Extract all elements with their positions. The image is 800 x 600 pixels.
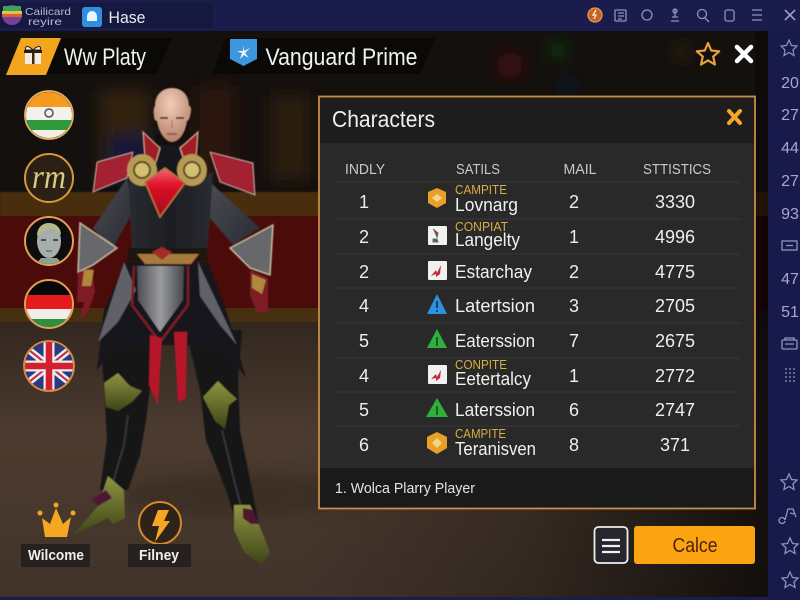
table column headers: SATILS: [456, 162, 500, 178]
row 6: 2772: [655, 366, 695, 386]
sidebar numbers: [781, 75, 799, 321]
menu button: [594, 527, 628, 563]
left boot: [72, 476, 125, 536]
row 7: 6: [569, 400, 579, 420]
sidebar numbers: 47: [781, 271, 799, 288]
row 1: [359, 183, 695, 215]
icon: gift: [24, 47, 42, 64]
belt: [128, 247, 207, 264]
row 2: Langelty: [455, 230, 520, 250]
character figure: [72, 88, 273, 565]
right arm: [210, 182, 260, 245]
bottom edge strip: [0, 597, 768, 600]
row 4: 2705: [655, 296, 695, 316]
gold spiral plates: [127, 154, 207, 186]
left gauntlet: [78, 223, 117, 272]
avatar: golden rune: [25, 154, 73, 202]
avatar: golden rune: rm: [32, 159, 66, 196]
icon: lightning: [139, 502, 181, 544]
row 8: [359, 427, 690, 459]
icon: cloud tab: [82, 7, 102, 27]
app name: Cailicard: [25, 6, 71, 18]
row 3: [359, 261, 695, 282]
tab: Ww Platy: [6, 38, 172, 75]
tab: Vanguard Prime: [212, 38, 435, 74]
row 8: CAMPITE: [455, 427, 506, 441]
row 2: 2: [359, 227, 369, 247]
panel footer: 1. Wolca Plarry Player: [335, 481, 475, 497]
row 7: Laterssion: [455, 400, 535, 420]
crown label: [21, 544, 90, 567]
avatar column: [24, 91, 74, 391]
right pauldron: [210, 152, 255, 195]
table column headers: MAIL: [564, 162, 596, 178]
row 8: 6: [359, 435, 369, 455]
panel header: [320, 98, 754, 143]
table column headers: [345, 162, 711, 178]
lightning button: [128, 502, 191, 567]
row 2: [359, 220, 695, 250]
head: [154, 88, 191, 142]
sidebar numbers: 20: [781, 75, 799, 92]
row 6: Eetertalcy: [455, 369, 531, 389]
row 1: CAMPITE: [455, 183, 507, 197]
row 4: Latertsion: [455, 296, 535, 316]
tab label: Vanguard Prime: [266, 44, 418, 71]
sidebar numbers: 44: [781, 140, 799, 157]
app logo: [2, 5, 22, 25]
row 6: 4: [359, 366, 369, 386]
row 2: CONPIAT: [455, 220, 508, 234]
left hand: [77, 268, 95, 320]
left pauldron: [93, 152, 133, 192]
tab label: Ww Platy: [64, 44, 146, 71]
panel: characters: [319, 96, 755, 508]
row 6: [359, 358, 695, 389]
chest gem: [145, 168, 185, 217]
row 2: 1: [569, 227, 579, 247]
sidebar numbers: 93: [781, 206, 799, 223]
row 4: [359, 294, 695, 316]
button: Calce: Calce: [672, 535, 718, 557]
button: Calce: [634, 526, 755, 564]
right gauntlet: [230, 225, 273, 275]
row 3: 2: [359, 262, 369, 282]
row 1: 1: [359, 192, 369, 212]
icon: crown: [38, 502, 76, 537]
orange gift tab: [6, 38, 61, 75]
row 4: 3: [569, 296, 579, 316]
row 8: Teranisven: [455, 439, 536, 459]
avatar: tricolour flag: [24, 280, 74, 329]
top navigation bar: [0, 0, 800, 31]
torso: [128, 172, 213, 250]
row 5: 5: [359, 331, 369, 351]
row 6: CONPITE: [455, 358, 507, 372]
table column headers: STTISTICS: [643, 162, 711, 178]
lightning label: [128, 544, 191, 567]
knee guards: [104, 373, 237, 429]
row 8: 371: [660, 435, 690, 455]
right hand: [250, 270, 268, 312]
top navigation bar: reyire: [28, 16, 62, 28]
right boot: [234, 505, 270, 565]
row 5: Eaterssion: [455, 331, 535, 351]
row 5: 7: [569, 331, 579, 351]
panel footer: [320, 468, 754, 508]
avatar: portrait: [25, 217, 73, 268]
row 3: 4775: [655, 262, 695, 282]
crown button: [21, 502, 90, 567]
row 5: [359, 329, 695, 351]
avatar: India flag: [25, 91, 73, 140]
icon: sidebar star: [781, 40, 797, 56]
neck and collar: [157, 145, 183, 181]
red tassels: [149, 332, 187, 405]
row 4: 4: [359, 296, 369, 316]
row 7: [359, 398, 695, 420]
sidebar numbers: 51: [781, 304, 799, 321]
row 2: 4996: [655, 227, 695, 247]
coat skirt: [97, 262, 246, 378]
sidebar numbers: 27: [781, 107, 799, 124]
toolbar icons: [588, 8, 795, 22]
icon: favourite star: [697, 43, 719, 65]
sidebar small icons: [779, 241, 798, 588]
tab label: Hase: [108, 9, 146, 27]
icon: blue shield: [230, 39, 257, 66]
row 3: Estarchay: [455, 262, 532, 282]
row 1: 3330: [655, 192, 695, 212]
row 5: 2675: [655, 331, 695, 351]
icon: close X: [737, 47, 751, 61]
row 8: 8: [569, 435, 579, 455]
row 6: 1: [569, 366, 579, 386]
crown button: Wilcome: [28, 548, 84, 564]
right sidebar: [768, 31, 800, 600]
row 1: 2: [569, 192, 579, 212]
row 7: 2747: [655, 400, 695, 420]
panel header: Characters: [332, 106, 435, 132]
left arm: [93, 178, 133, 248]
avatar: UK flag: [24, 341, 74, 391]
row 7: 5: [359, 400, 369, 420]
table column headers: INDLY: [345, 162, 385, 178]
sidebar numbers: 27: [781, 173, 799, 190]
lightning button: Filney: [139, 548, 179, 564]
row 3: 2: [569, 262, 579, 282]
row 1: Lovnarg: [455, 195, 518, 215]
legs: [100, 330, 258, 528]
